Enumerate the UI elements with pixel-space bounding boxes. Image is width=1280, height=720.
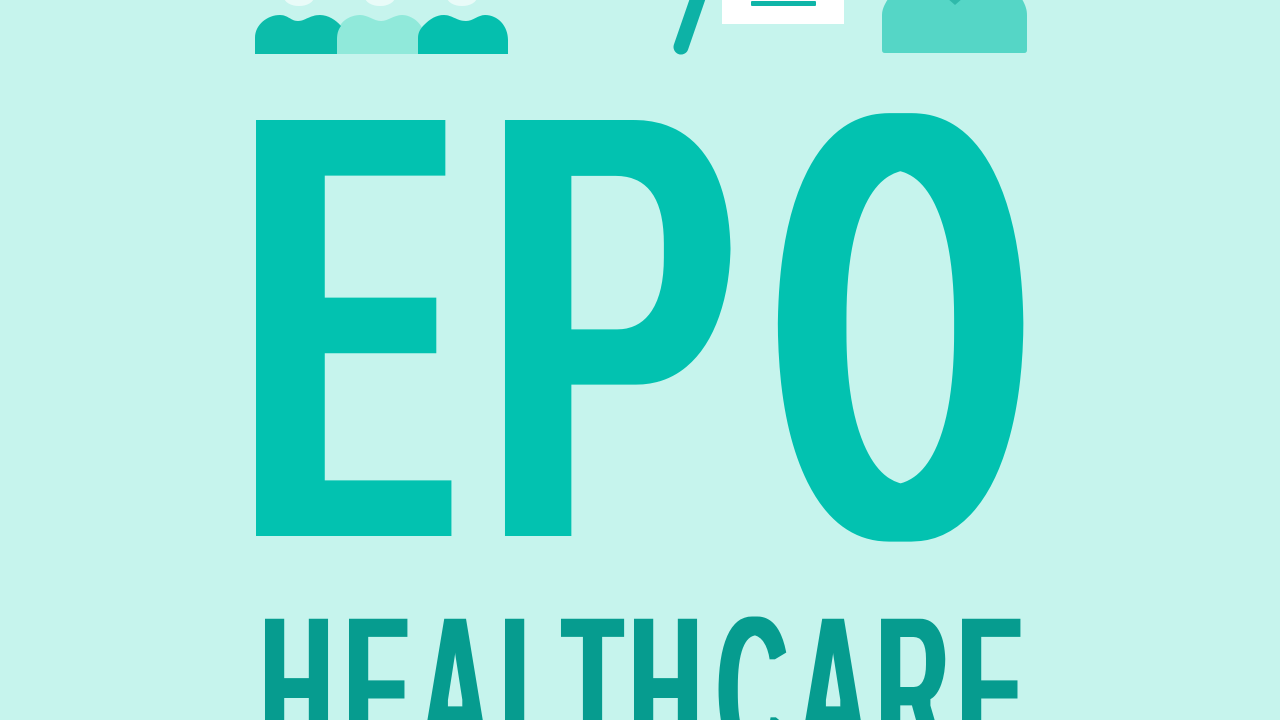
icon: pole [681,0,700,47]
icon: right person body [418,15,508,54]
icon: white card [722,0,844,24]
icon: card line [751,1,816,6]
icon: clipboard with pole [681,0,844,47]
icon: middle person body [337,15,424,54]
title: EPO [248,0,1026,677]
icon: left person body [255,15,341,54]
icon: collar notch [947,0,963,5]
icon: person with collar [882,0,1027,53]
icon: shoulders [882,0,1027,53]
icon: group of three people [255,0,508,54]
icon: person heads [284,0,477,6]
